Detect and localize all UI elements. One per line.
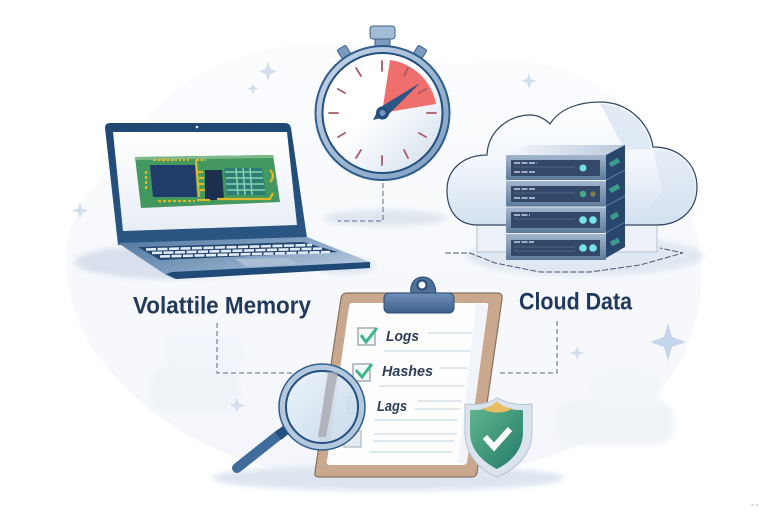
- row: Lags: [348, 397, 462, 420]
- icon: clipboard checklist: [315, 277, 502, 477]
- icon: laptop: [75, 123, 375, 279]
- heading: Volatile Memory: Volattile Memory: [133, 292, 312, 320]
- icon: cloud and server: [445, 102, 703, 276]
- needle: [373, 83, 420, 120]
- connector: volatile memory to clipboard: [217, 323, 300, 373]
- ground shadow: [467, 236, 703, 276]
- watermark dots: × ×: [751, 503, 758, 509]
- keyboard: [138, 242, 338, 260]
- row: blank: [344, 431, 457, 452]
- row: Hashes: Hashes: [382, 364, 433, 380]
- connector: cloud data to clipboard: [497, 321, 557, 373]
- clip: [411, 277, 436, 295]
- icon: stopwatch: [316, 26, 450, 180]
- cloud: [447, 102, 697, 225]
- row: Hashes: [353, 364, 467, 386]
- sparkles: [72, 62, 686, 413]
- base: [118, 237, 370, 279]
- row: Logs: Logs: [386, 329, 419, 345]
- server dashed outline: [445, 248, 683, 272]
- row: Logs: [358, 328, 472, 351]
- heading: Cloud Data: Cloud Data: [519, 288, 633, 316]
- red sector: [382, 60, 436, 113]
- row: Lags: Lags: [377, 399, 407, 415]
- soft shadow below stopwatch: [323, 210, 447, 226]
- laptop shadow: [75, 245, 265, 279]
- icon: shield: [465, 398, 532, 477]
- ground shadow under clipboard: [212, 465, 564, 491]
- icon: magnifying glass: [237, 364, 365, 468]
- trackpad: [235, 258, 298, 267]
- connector: stopwatch to laptop: [338, 183, 383, 221]
- memory module: [135, 155, 280, 208]
- server rack: [506, 145, 625, 260]
- background blob: [66, 44, 701, 483]
